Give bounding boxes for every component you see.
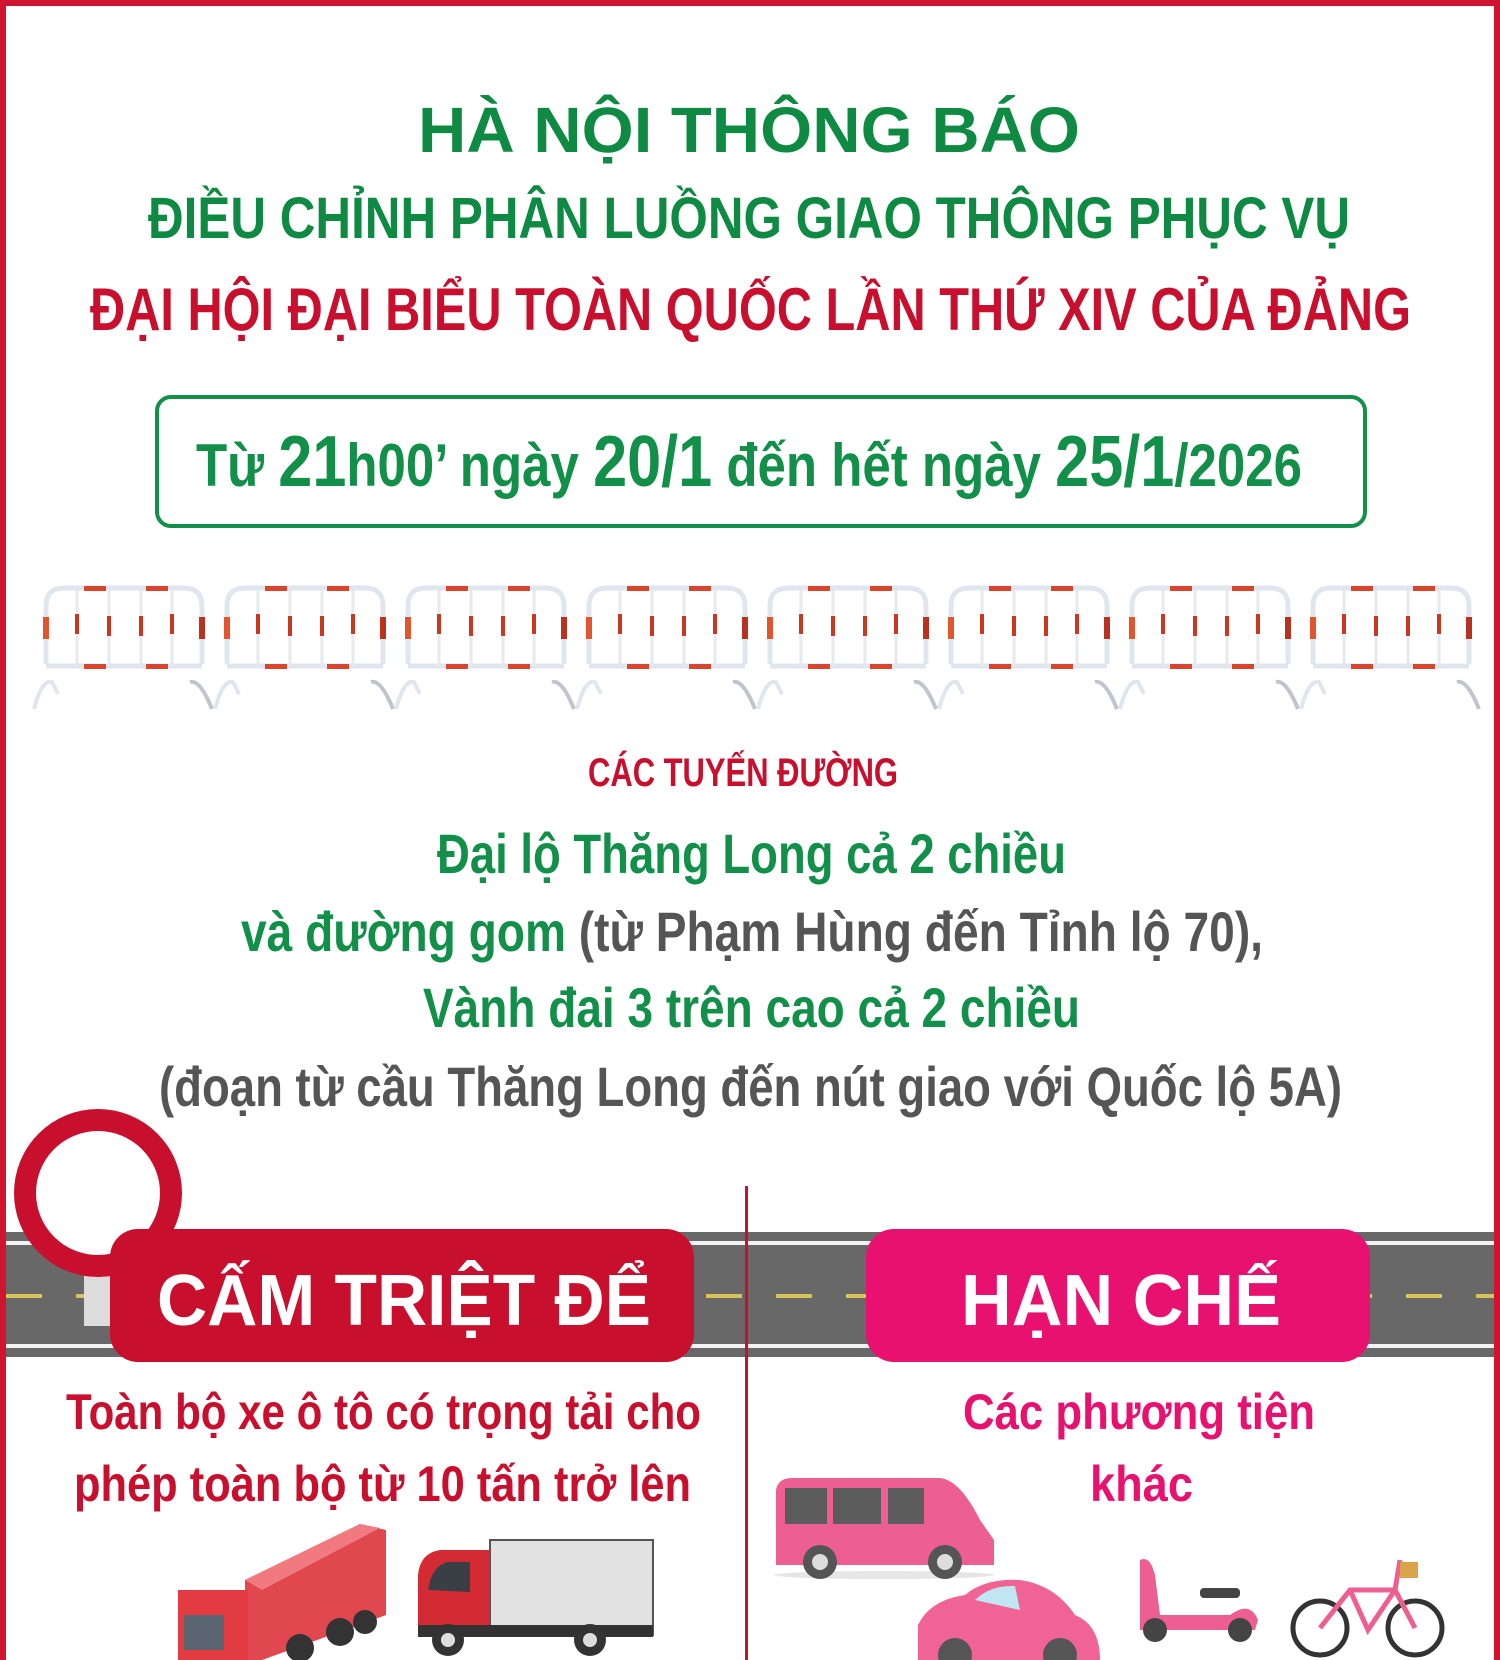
panel: hạn chế: HẠN CHẾ (961, 1260, 1281, 1341)
icon: scooter (1140, 1559, 1258, 1642)
icon: red truck (178, 1524, 386, 1660)
panel: cấm triệt để (110, 1229, 694, 1362)
date text: Từ 21h00’ ngày 20/1 đến hết ngày 25/1/2026 (196, 422, 1302, 502)
routes heading: CÁC TUYẾN ĐƯỜNG (588, 749, 898, 795)
panel: hạn chế (866, 1229, 1370, 1362)
routes text: Vành đai 3 trên cao cả 2 chiều (423, 976, 1080, 1039)
text: banned vehicles: phép toàn bộ từ 10 tấn trở lên (74, 1456, 691, 1512)
text: restricted vehicles: khác (1090, 1456, 1193, 1512)
icon: bicycle (1293, 1560, 1442, 1655)
divider (745, 1186, 748, 1660)
title line 1: HÀ NỘI THÔNG BÁO (418, 93, 1080, 166)
icon: van (774, 1478, 994, 1579)
barriers row (34, 586, 1479, 709)
text: restricted vehicles (963, 1384, 1315, 1512)
road band (6, 1232, 1494, 1357)
date box (157, 397, 1365, 526)
icon: car (918, 1580, 1100, 1660)
icon: white truck (418, 1540, 653, 1656)
routes text (159, 822, 1342, 1118)
panel: cấm triệt để: CẤM TRIỆT ĐỂ (157, 1260, 651, 1341)
routes text: và đường gom (từ Phạm Hùng đến Tỉnh lộ 70), (241, 900, 1263, 963)
text: banned vehicles: Toàn bộ xe ô tô có trọng tải cho (66, 1384, 701, 1440)
routes text: Đại lộ Thăng Long cả 2 chiều (437, 822, 1066, 885)
text: restricted vehicles: Các phương tiện (963, 1384, 1315, 1440)
icon: road sign (25, 1120, 171, 1326)
text: banned vehicles (66, 1384, 701, 1512)
